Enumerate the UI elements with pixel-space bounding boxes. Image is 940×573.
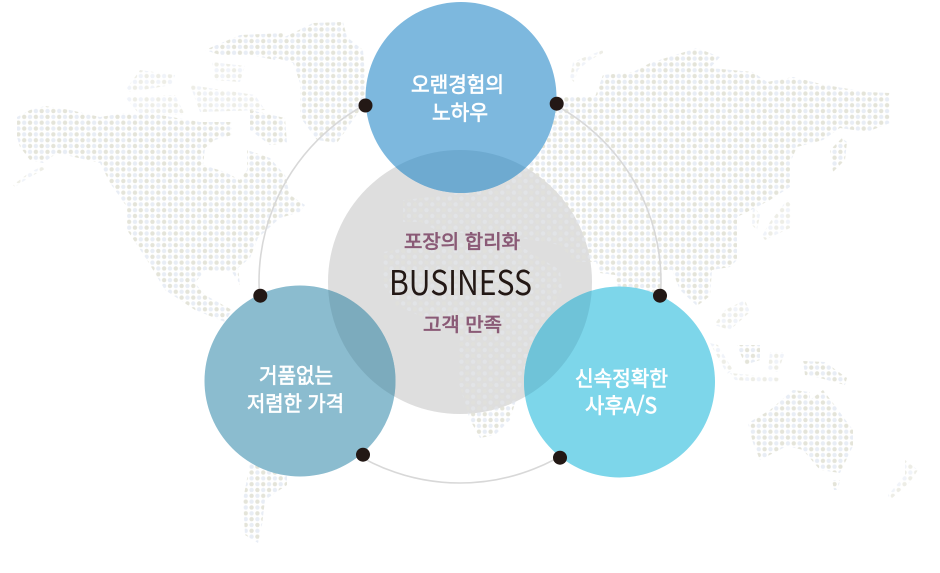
left circle: low price (204, 286, 396, 476)
center text block: 포장의 합리화 (404, 227, 520, 254)
connector nodes (253, 97, 667, 465)
left circle: low price: 저렴한 가격 (247, 388, 344, 418)
center text block (389, 227, 532, 337)
top circle: long experience know-how (366, 2, 556, 193)
right circle: fast after-sales service: 신속정확한 (575, 363, 668, 393)
center grey circle with map showing through (328, 167, 592, 414)
top circle: long experience know-how: 노하우 (432, 97, 488, 127)
connecting ring (259, 81, 661, 483)
left circle: low price: 거품없는 (259, 360, 333, 390)
center text block: 고객 만족 (423, 310, 502, 337)
right circle: fast after-sales service (524, 286, 715, 478)
top circle: long experience know-how: 오랜경험의 (411, 69, 504, 99)
right circle: fast after-sales service: 사후A/S (585, 390, 657, 420)
center text block: BUSINESS (389, 256, 532, 305)
